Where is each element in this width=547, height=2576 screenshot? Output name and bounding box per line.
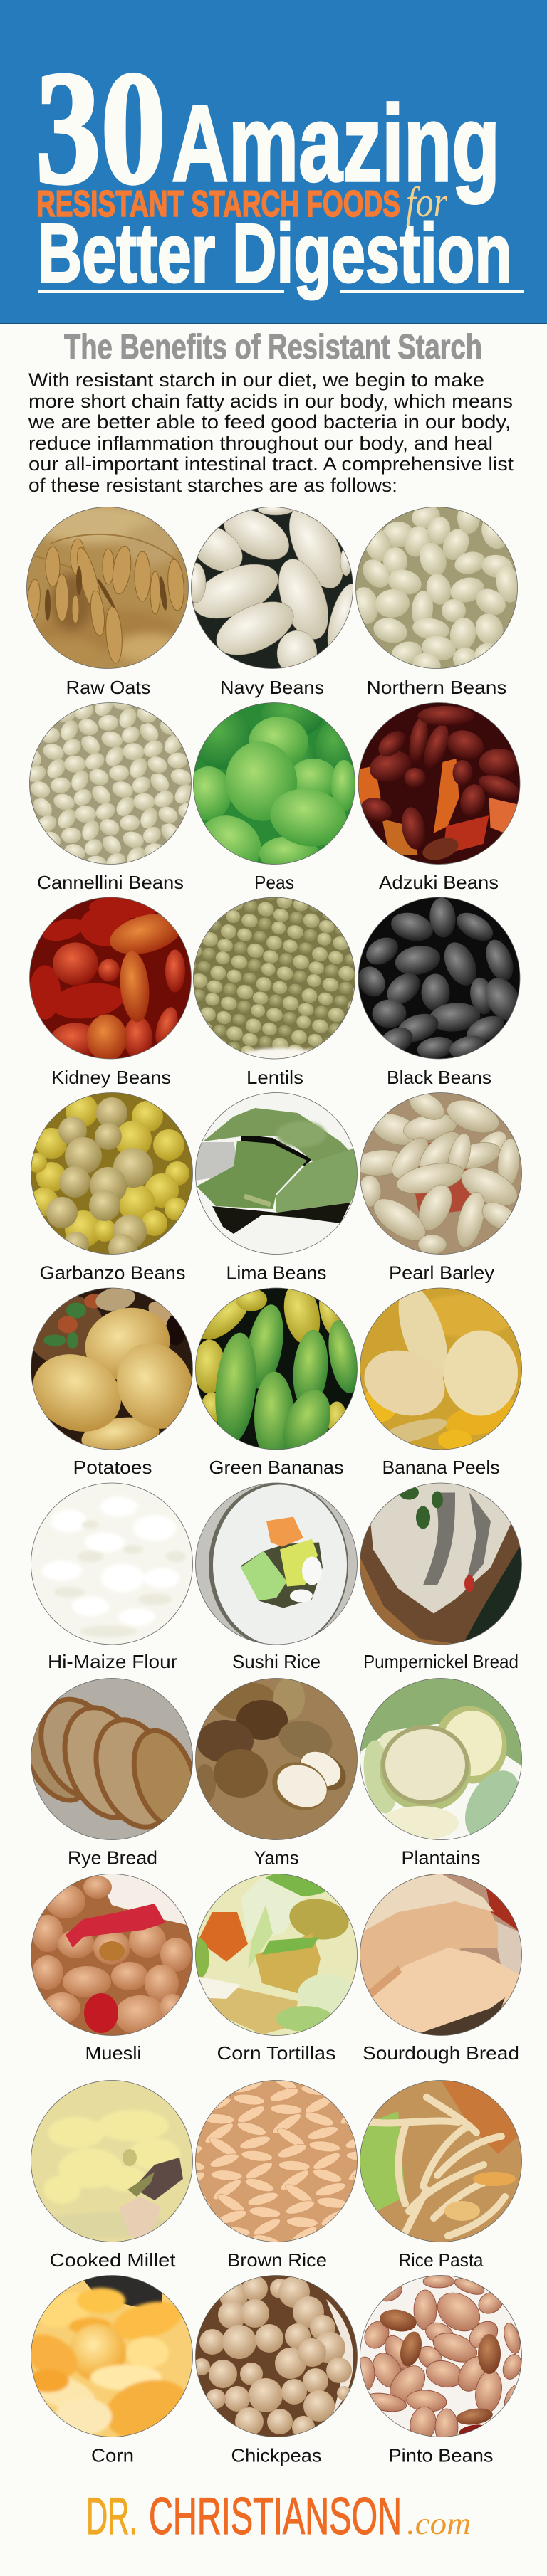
food item: Black Beans (353, 897, 528, 1088)
photo: sourdough bread (360, 1874, 522, 2036)
photo: pinto beans (355, 2275, 531, 2446)
food item: Lentils (193, 897, 355, 1088)
photo: chickpeas (193, 2275, 358, 2439)
food item: Pinto Beans (355, 2275, 531, 2466)
title underline right (340, 290, 524, 293)
food item: Potatoes (31, 1288, 193, 1474)
label: Sushi Rice (232, 1651, 321, 1672)
label: Raw Oats (66, 677, 151, 698)
photo: lentils (193, 897, 355, 1067)
food item: Kidney Beans (29, 895, 192, 1088)
photo: cooked millet (31, 2080, 193, 2242)
food item: Pumpernickel Bread (360, 1483, 522, 1672)
subtitle script word for: for (406, 179, 448, 226)
footer logo: DrChristianson.com: DR. (86, 2488, 137, 2545)
food item: Corn Tortillas (184, 1871, 358, 2064)
label: Kidney Beans (51, 1067, 171, 1088)
title numeral 30: 30 (36, 38, 166, 218)
label: Peas (254, 872, 294, 893)
label: Garbanzo Beans (40, 1262, 185, 1284)
photo: raw oats (25, 504, 189, 669)
food item: Navy Beans (191, 507, 353, 697)
intro paragraph (28, 369, 514, 496)
photo: adzuki beans (358, 702, 522, 865)
food item: Sushi Rice (195, 1483, 358, 1672)
label: Hi-Maize Flour (48, 1651, 177, 1672)
food item: Yams (194, 1677, 358, 1869)
label: Plantains (402, 1847, 480, 1869)
food item: Raw Oats (25, 504, 189, 698)
photo: banana peels (360, 1288, 522, 1450)
label: Lentils (246, 1067, 303, 1088)
photo: cannellini beans (29, 702, 192, 865)
intro paragraph: With resistant starch in our diet, we begin to make (28, 369, 484, 391)
label: Banana Peels (382, 1457, 500, 1478)
label: Rice Pasta (399, 2249, 484, 2271)
subtitle orange: RESISTANT STARCH FOODS (36, 184, 400, 225)
photo: muesli (31, 1874, 193, 2036)
photo: sushi rice (195, 1483, 358, 1648)
photo: black beans (353, 897, 528, 1062)
food item: Northern Beans (355, 507, 518, 695)
food item: Hi-Maize Flour (31, 1483, 193, 1672)
label: Rye Bread (68, 1847, 157, 1869)
photo: hi-maize flour (31, 1483, 193, 1645)
label: Yams (254, 1847, 299, 1869)
photo: green bananas (195, 1288, 358, 1450)
intro paragraph: reduce inflammation throughout our body, and heal (28, 433, 493, 454)
food item: Banana Peels (360, 1288, 522, 1474)
photo: yams (194, 1677, 358, 1840)
label: Green Bananas (209, 1457, 343, 1478)
label: Potatoes (73, 1457, 152, 1478)
photo: northern beans (355, 507, 518, 669)
label: Brown Rice (227, 2249, 327, 2271)
photo: peas (193, 702, 355, 865)
photo: pearl barley (354, 1087, 523, 1255)
food item: Adzuki Beans (358, 702, 522, 893)
title underline left (38, 290, 284, 293)
food item: Brown Rice (195, 2080, 358, 2271)
label: Cooked Millet (50, 2249, 176, 2271)
photo: lima beans (195, 1092, 358, 1255)
label: Muesli (85, 2042, 141, 2064)
food item: Rye Bread (31, 1678, 193, 1868)
label: Chickpeas (231, 2445, 322, 2466)
photo: pumpernickel bread (360, 1483, 522, 1645)
food item: Garbanzo Beans (27, 1092, 193, 1284)
photo: plantains (358, 1678, 531, 1848)
label: Cannellini Beans (37, 872, 184, 893)
food item: Sourdough Bread (360, 1874, 522, 2064)
photo: corn tortillas (184, 1871, 358, 2036)
footer logo: DrChristianson.com: CHRISTIANSON (149, 2488, 402, 2545)
photo: navy beans (191, 507, 353, 669)
label: Black Beans (387, 1067, 491, 1088)
photo: rye bread (31, 1678, 193, 1840)
label: Lima Beans (226, 1262, 326, 1284)
label: Pinto Beans (389, 2445, 493, 2466)
food item: Cooked Millet (31, 2080, 193, 2271)
photo: brown rice (195, 2080, 358, 2242)
label: Corn Tortillas (217, 2042, 336, 2064)
label: Northern Beans (366, 677, 507, 698)
food item: Lima Beans (195, 1092, 358, 1284)
label: Corn (91, 2445, 134, 2466)
photo: potatoes (31, 1288, 193, 1450)
label: Pearl Barley (389, 1262, 494, 1284)
label: Adzuki Beans (379, 872, 499, 893)
food item: Muesli (31, 1874, 193, 2064)
footer logo: DrChristianson.com: .com (407, 2506, 471, 2541)
photo: corn (17, 2275, 196, 2448)
intro paragraph: we are better able to feed good bacteria in our body, (28, 411, 511, 433)
intro paragraph: more short chain fatty acids in our body, which means (28, 391, 513, 412)
food item: Chickpeas (193, 2275, 358, 2466)
intro paragraph: of these resistant starches are as follows: (28, 475, 397, 496)
food item: Corn (17, 2275, 196, 2466)
panel: blue title header (0, 0, 547, 324)
food item: Peas (193, 702, 355, 890)
intro paragraph: our all-important intestinal tract. A comprehensive list (28, 453, 514, 475)
label: Sourdough Bread (363, 2042, 519, 2064)
food item: Rice Pasta (360, 2080, 522, 2271)
food item: Pearl Barley (354, 1087, 523, 1284)
food item: Cannellini Beans (29, 702, 192, 893)
photo: kidney beans (29, 895, 192, 1062)
food item: Plantains (358, 1678, 531, 1869)
label: Pumpernickel Bread (363, 1651, 519, 1672)
label: Navy Beans (220, 677, 324, 698)
photo: rice pasta (360, 2080, 522, 2242)
food item: Green Bananas (195, 1288, 358, 1474)
photo: garbanzo beans (27, 1092, 193, 1262)
